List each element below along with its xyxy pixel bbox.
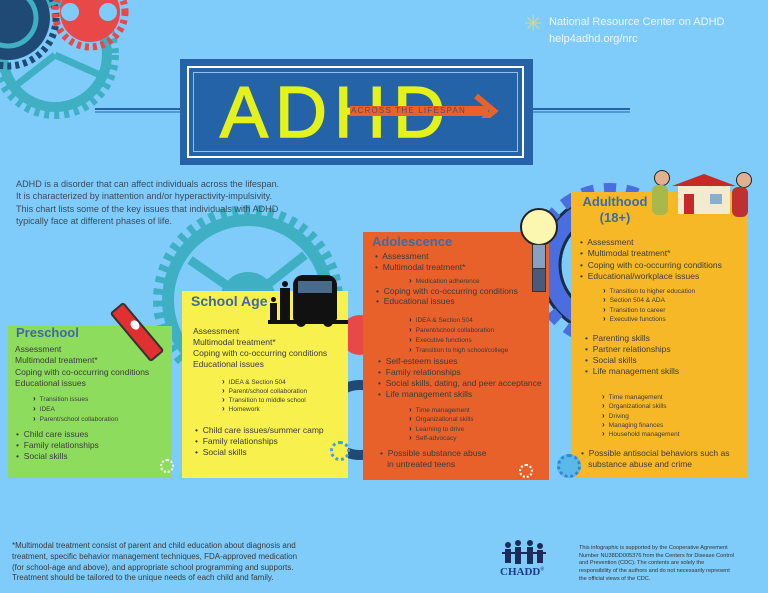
disclaimer text: This infographic is supported by the Cooperative Agreement <box>579 545 728 551</box>
panel: preschool <box>8 326 172 478</box>
panel: school age: Educational issues <box>193 359 264 369</box>
panel: preschool: › Transition issues <box>33 394 88 403</box>
footnote text <box>12 541 297 582</box>
panel: preschool: Assessment <box>15 344 61 354</box>
panel: adolescence: › Organizational skills <box>409 414 473 423</box>
panel: adulthood: › Household management <box>602 429 680 438</box>
intro text: This chart lists some of the key issues that individuals with ADHD <box>16 204 278 214</box>
panel: adolescence: • Coping with co-occurring conditions <box>376 286 518 296</box>
panel: adulthood: • Life management skills <box>585 366 679 376</box>
panel: preschool: Multimodal treatment* <box>15 355 98 365</box>
panel: adulthood: › Managing finances <box>602 420 663 429</box>
intro text: It is characterized by inattention and/or hyperactivity-impulsivity. <box>16 191 272 201</box>
heading: adolescence: Adolescence <box>372 234 452 249</box>
panel: adolescence: › Learning to drive <box>409 424 464 433</box>
disclaimer text: the official views of the CDC. <box>579 576 650 582</box>
panel: adulthood: • Multimodal treatment* <box>580 248 670 258</box>
icon: CHADD logo: CHADD® <box>500 566 544 578</box>
panel: adolescence: › Transition to high school/college <box>409 345 508 354</box>
header: National Resource Center: help4adhd.org/nrc <box>549 33 638 45</box>
heading: adulthood: (18+) <box>600 210 630 225</box>
panel: adulthood: • Educational/workplace issues <box>580 271 699 281</box>
icon: school bus and people <box>268 275 348 327</box>
panel: adolescence: in untreated teens <box>387 458 455 468</box>
panel: adulthood: › Transition to career <box>603 305 665 314</box>
panel: school age: • Child care issues/summer camp <box>195 425 324 435</box>
disclaimer text: and Prevention (CDC). The contents are solely the <box>579 560 704 566</box>
icon: crayon <box>110 302 164 362</box>
panel: school age: › Parent/school collaboration <box>222 386 307 395</box>
panel: adolescence: • Life management skills <box>378 389 472 399</box>
panel: adolescence: • Family relationships <box>378 367 461 377</box>
panel: adulthood: › Section 504 & ADA <box>603 295 665 304</box>
panel: adolescence: • Possible substance abuse <box>380 448 486 458</box>
panel: school age: Multimodal treatment* <box>193 337 276 347</box>
panel: preschool: › Parent/school collaboration <box>33 414 118 423</box>
panel: preschool: • Social skills <box>16 451 68 461</box>
panel: preschool: › IDEA <box>33 404 55 413</box>
title text ADHD: ADHD <box>220 73 452 153</box>
panel: preschool: Educational issues <box>15 378 86 388</box>
panel: school age: › IDEA & Section 504 <box>222 377 286 386</box>
title box <box>180 59 533 165</box>
panel: adolescence: • Social skills, dating, and peer acceptance <box>378 378 542 388</box>
footnote text: treatment, specific behavior management techniques, FDA-approved medication <box>12 552 297 561</box>
panel: school age: Assessment <box>193 326 239 336</box>
intro text: typically face at different phases of life. <box>16 216 172 226</box>
panel: adolescence: • Educational issues <box>376 296 455 306</box>
disclaimer text: Number NU38DD005376 from the Centers for Disease Control <box>579 553 734 559</box>
arrow: across the lifespan <box>350 94 499 118</box>
panel: adulthood: › Driving <box>602 411 629 420</box>
panel: adulthood: • Coping with co-occurring conditions <box>580 260 722 270</box>
panel: adolescence: • Multimodal treatment* <box>375 262 465 272</box>
heading: adulthood <box>582 194 647 225</box>
panel: school age: › Homework <box>222 404 260 413</box>
panel: adolescence: • Self-esteem issues <box>378 356 458 366</box>
panel: adulthood: › Executive functions <box>603 314 666 323</box>
panel: adolescence: › IDEA & Section 504 <box>409 315 473 324</box>
panel: adulthood: › Time management <box>602 392 663 401</box>
panel: adulthood: • Social skills <box>585 355 637 365</box>
intro text <box>16 179 279 226</box>
panel: adulthood: › Organizational skills <box>602 401 666 410</box>
panel: school age <box>182 291 348 478</box>
panel: adolescence: › Medication adherence <box>409 276 480 285</box>
panel: school age: Coping with co-occurring conditions <box>193 348 327 358</box>
disclaimer text: responsibility of the authors and do not necessarily represent <box>579 568 730 574</box>
panel: adulthood: • Parenting skills <box>585 333 650 343</box>
panel: adolescence: › Executive functions <box>409 335 472 344</box>
icon: small gear <box>160 459 174 473</box>
intro text: ADHD is a disorder that can affect individuals across the lifespan. <box>16 179 279 189</box>
panel: adolescence: › Time management <box>409 405 470 414</box>
arrow: across the lifespan: ACROSS THE LIFESPAN <box>351 106 466 115</box>
icon: small gear <box>519 464 533 478</box>
panel: adulthood: substance abuse and crime <box>588 459 692 469</box>
panel: adolescence: › Self-advocacy <box>409 433 456 442</box>
footnote text: (for school-age and above), and appropriate school programming and supports. <box>12 563 294 572</box>
panel: adulthood <box>571 192 748 478</box>
icon: CHADD logo <box>500 540 546 578</box>
heading: preschool: Preschool <box>16 325 79 340</box>
panel: preschool: • Family relationships <box>16 440 99 450</box>
panel: adulthood: • Partner relationships <box>585 344 671 354</box>
header: National Resource Center <box>524 11 724 45</box>
panel: school age: • Family relationships <box>195 436 278 446</box>
panel: preschool: • Child care issues <box>16 429 88 439</box>
panel: adulthood: › Transition to higher education <box>603 286 695 295</box>
heading: school age: School Age <box>191 293 268 309</box>
panel: adulthood: • Possible antisocial behaviors such as <box>581 448 730 458</box>
icon: boy illustration <box>520 208 558 292</box>
heading: adulthood: Adulthood <box>582 194 647 209</box>
icon: sunburst logo: ✳ <box>524 11 542 36</box>
footnote text: Treatment should be tailored to the unique needs of each child and family. <box>12 573 274 582</box>
panel: adulthood: • Assessment <box>580 237 634 247</box>
panel: school age: › Transition to middle school <box>222 395 306 404</box>
panel: adolescence <box>363 232 549 480</box>
footnote text: *Multimodal treatment consist of parent and child education about diagnosis and <box>12 541 296 550</box>
icon: blue gear <box>330 441 350 461</box>
header: National Resource Center: National Resource Center on ADHD <box>549 16 724 28</box>
panel: school age: • Social skills <box>195 447 247 457</box>
icon: people carrying house <box>652 170 752 217</box>
icon: blue gear near adulthood <box>557 454 581 478</box>
panel: preschool: Coping with co-occurring conditions <box>15 367 149 377</box>
panel: adolescence: › Parent/school collaboration <box>409 325 494 334</box>
panel: adolescence: • Assessment <box>375 251 429 261</box>
disclaimer text <box>579 545 734 582</box>
